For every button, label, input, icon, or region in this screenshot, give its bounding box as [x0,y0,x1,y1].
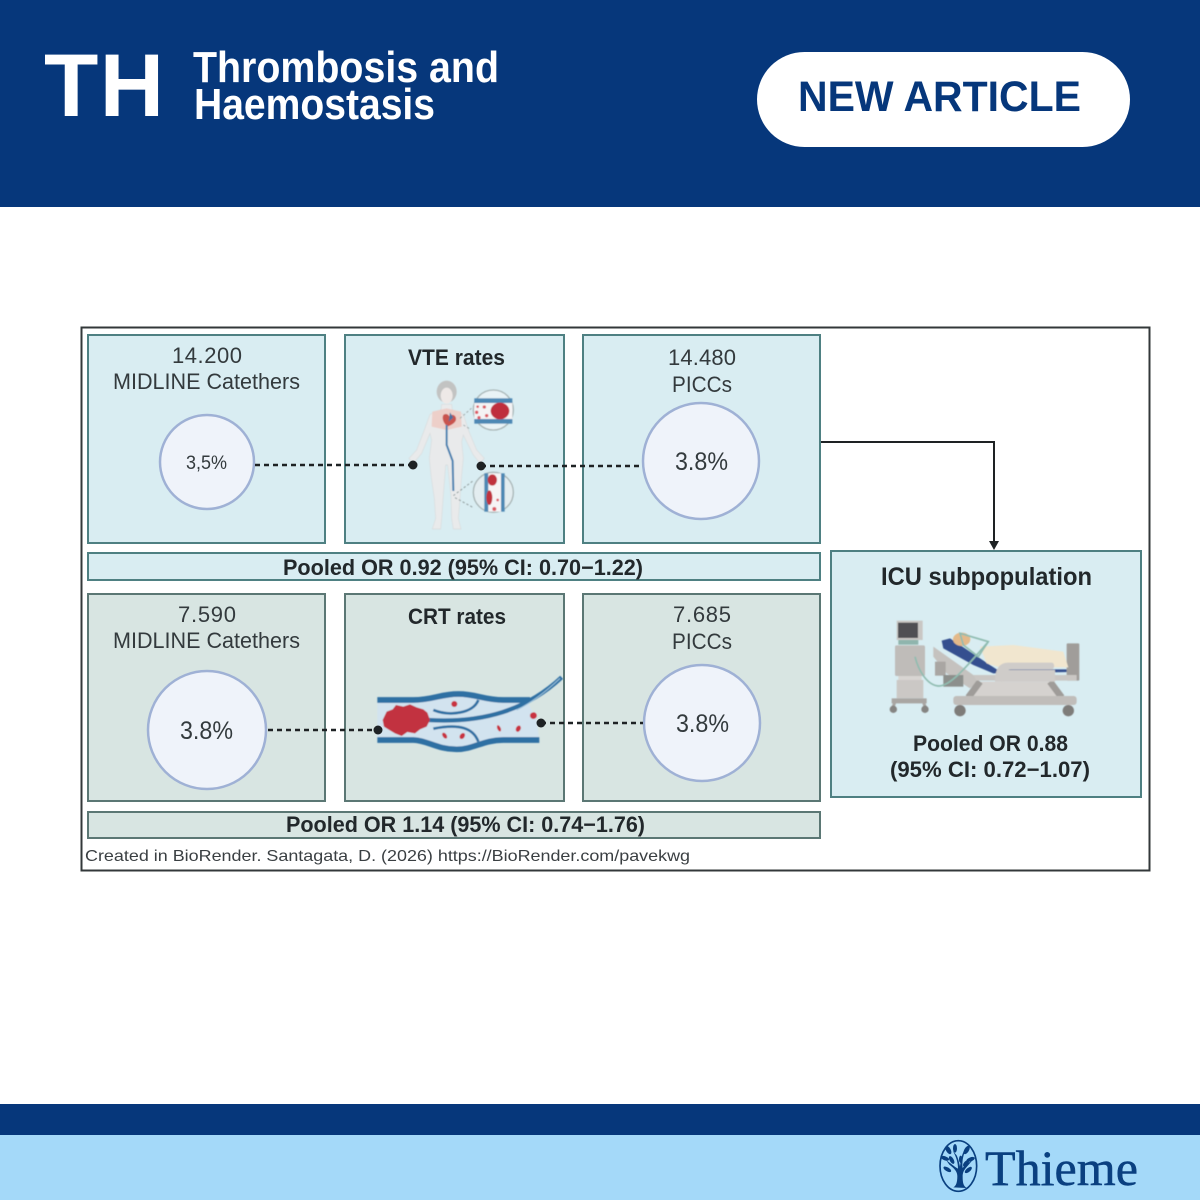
rate circle 3.8% [643,403,759,519]
panel: midline catheters CRT: 7.590 [178,602,236,627]
panel: PICCs VTE: 14.480 [668,345,736,370]
rate circle 3,5% [160,415,254,509]
panel: PICCs CRT: 7.685 [673,602,731,627]
rate circle 3.8% [644,665,760,781]
new article badge [757,52,1130,147]
VTE pooled OR bar: Pooled OR 0.92 (95% CI: 0.70−1.22) [283,555,643,580]
main figure frame [82,328,1150,870]
new article badge: NEW ARTICLE [798,73,1081,121]
wordmark: Thieme [985,1140,1138,1196]
panel: PICCs CRT: PICCs [672,629,732,654]
panel: PICCs VTE [583,335,820,543]
journal name: Haemostasis [194,80,435,129]
panel: VTE rates: VTE rates [408,345,505,370]
panel: VTE rates [345,335,564,543]
Thieme logo [940,1140,1138,1196]
panel: CRT rates: CRT rates [408,604,506,629]
connector: midline to clot [268,726,382,734]
header band [0,0,1200,207]
panel: midline catheters VTE: MIDLINE Catethers [113,369,300,394]
icon: tree in oval [940,1141,977,1191]
CRT pooled OR bar: Pooled OR 1.14 (95% CI: 0.74−1.76) [286,812,645,837]
panel: ICU subpopulation: (95% CI: 0.72−1.07) [890,757,1090,782]
journal abbreviation TH: TH [44,35,164,135]
arrow to ICU panel [821,442,999,550]
rate circle 3,5%: 3,5% [186,453,227,474]
connector: midline to body [255,460,418,470]
panel: midline catheters VTE [88,335,325,543]
panel: ICU subpopulation: ICU subpopulation [881,563,1092,591]
icon: ICU bed and ventilator [890,621,1079,716]
journal name [193,43,499,129]
rate circle 3.8%: 3.8% [675,448,728,476]
CRT pooled OR bar [88,812,820,838]
panel: midline catheters CRT: MIDLINE Catethers [113,628,300,653]
panel: PICCs CRT [583,594,820,801]
connector: body to PICC [476,462,643,470]
journal name: Thrombosis and [193,43,499,92]
footer band [0,1104,1200,1200]
VTE pooled OR bar [88,553,820,580]
icon: human body with clots [409,381,513,529]
panel: CRT rates [345,594,564,801]
rate circle 3.8% [148,671,266,789]
BioRender credit: Created in BioRender. Santagata, D. (2026) https://BioRender.com/pavekwg [85,848,690,865]
panel: midline catheters VTE: 14.200 [172,343,242,368]
connector: catheter to PICC [536,718,643,728]
panel: midline catheters CRT [88,594,325,801]
rate circle 3.8%: 3.8% [180,717,233,745]
icon: catheter vein with clot [377,677,562,749]
rate circle 3.8%: 3.8% [676,710,729,738]
panel: ICU subpopulation [831,551,1141,797]
panel: PICCs VTE: PICCs [672,372,732,397]
panel: ICU subpopulation: Pooled OR 0.88 [913,731,1068,756]
